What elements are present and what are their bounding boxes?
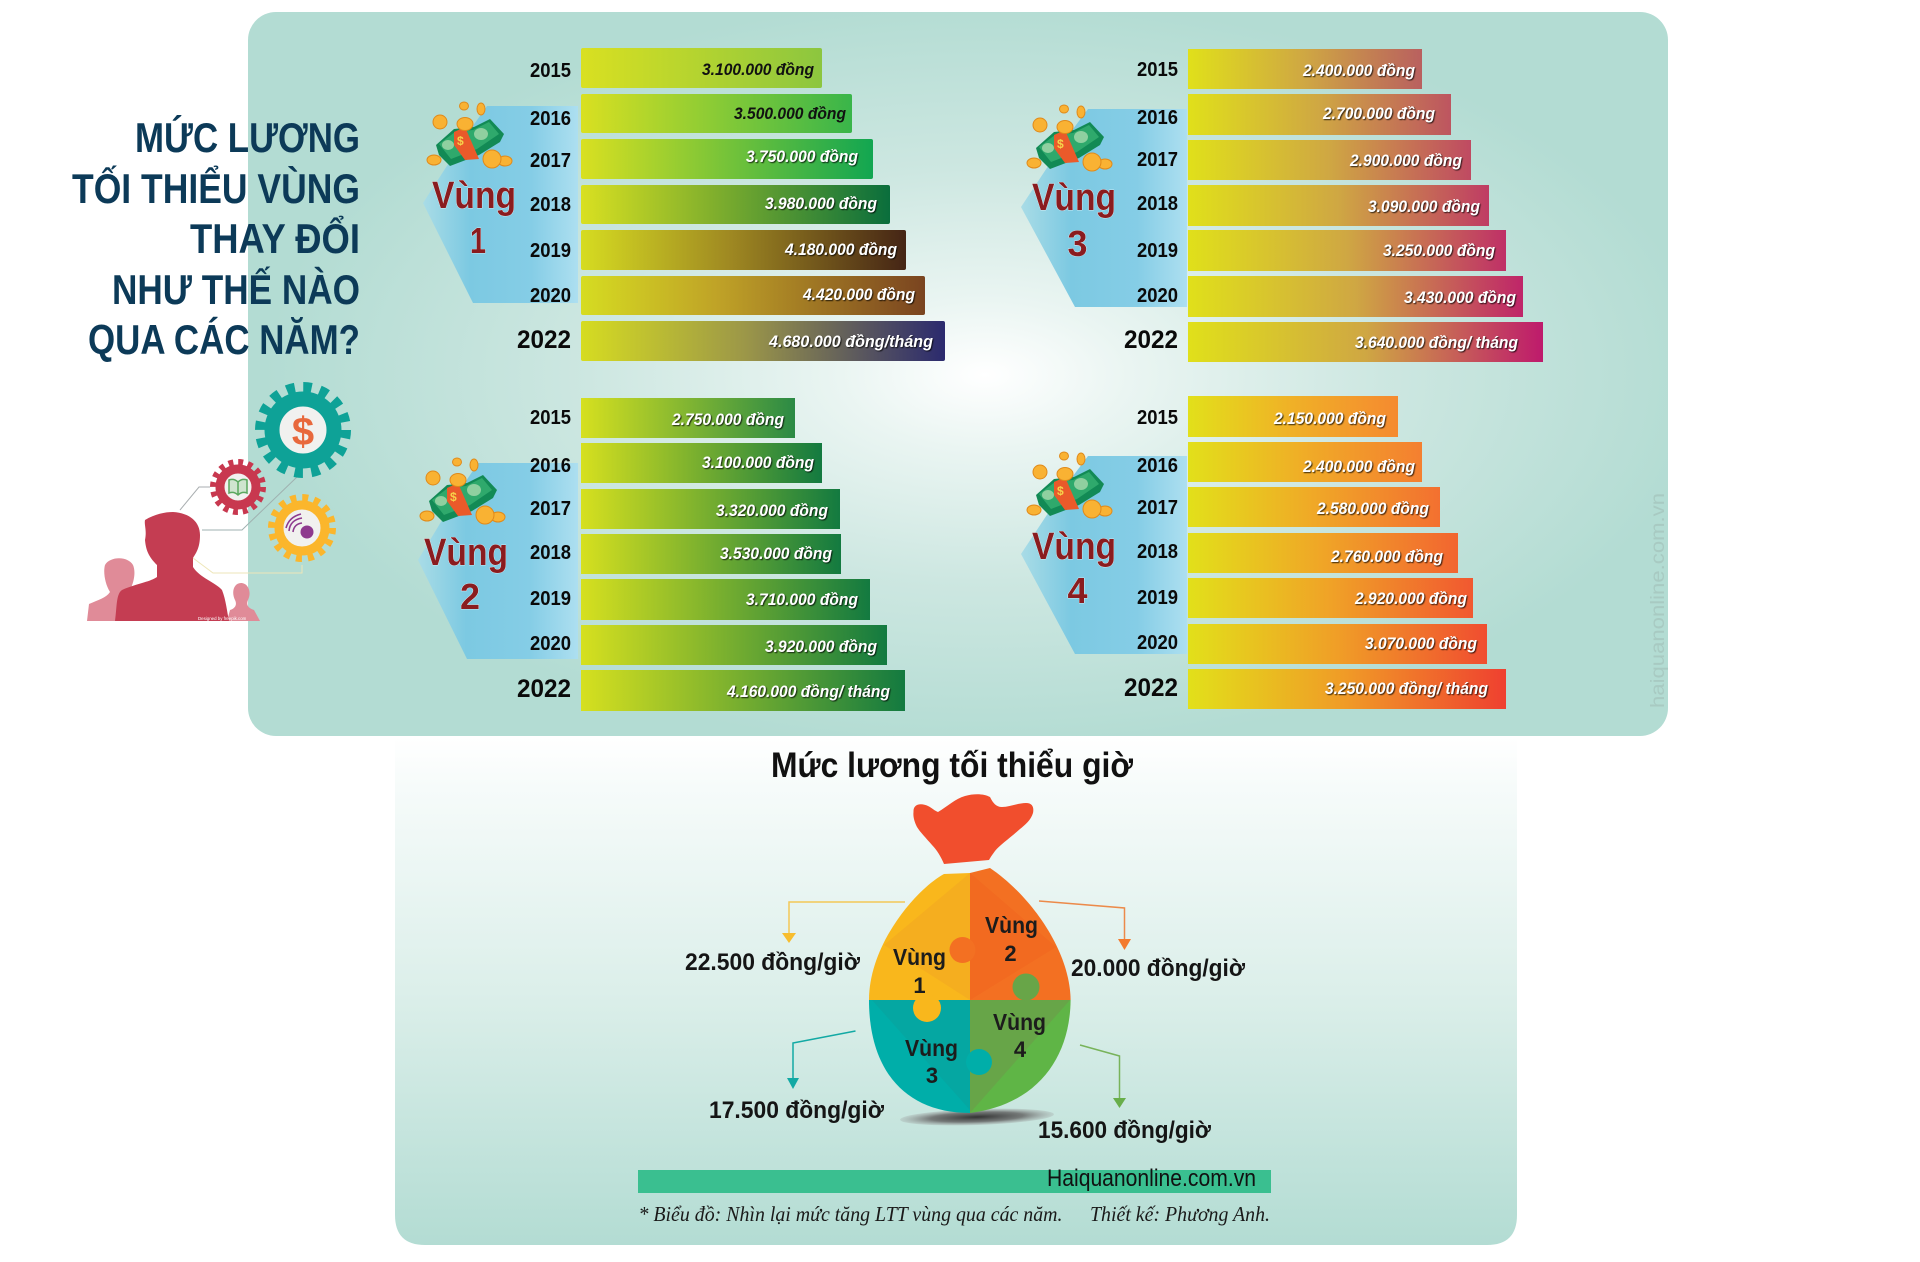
- bar: 2015: 2015: [530, 60, 571, 82]
- bar: 2019: 2019: [530, 588, 571, 610]
- icon: money and coins: [1027, 105, 1112, 171]
- bar: 2016: [530, 94, 852, 133]
- bar: 2017: 2.580.000 đồng: [1316, 499, 1430, 518]
- bar: 2015: 2015: [1137, 59, 1178, 81]
- bar: 2019: 4.180.000 đồng: [784, 240, 898, 259]
- bar: 2017: 3.320.000 đồng: [716, 501, 829, 520]
- title: [72, 113, 360, 363]
- bar: 2020: 4.420.000 đồng: [802, 285, 916, 304]
- label: Vùng 2: 2: [460, 576, 480, 617]
- bar: 2018: 2018: [530, 194, 571, 216]
- icon: teal gear with dollar: $: [292, 410, 314, 454]
- label: Vùng 1: Vùng: [432, 175, 516, 217]
- label: Vùng 4: 4: [1068, 570, 1088, 611]
- heading: hourly minimum wage: Mức lương tối thiểu giờ: [771, 746, 1133, 785]
- bar: 2020: [530, 276, 925, 315]
- label: Vùng 3: 3: [926, 1063, 938, 1088]
- value: Vùng 1 hourly: 22.500 đồng/giờ: [685, 949, 861, 976]
- bar: 2022: [1124, 322, 1543, 362]
- arrow: Vùng 2: [1039, 901, 1131, 950]
- bar: 2019: 2.920.000 đồng: [1354, 589, 1468, 608]
- bar: 2020: 2020: [1137, 285, 1178, 307]
- puzzle piece: Vùng 2: [970, 868, 1071, 1000]
- bar: 2019: 2019: [1137, 240, 1178, 262]
- label: Vùng 3: [1032, 177, 1116, 264]
- bar: 2019: [530, 579, 870, 620]
- label: Vùng 3: Vùng: [905, 1035, 958, 1061]
- title: QUA CÁC NĂM?: [88, 316, 360, 363]
- label: Vùng 2: Vùng: [424, 532, 508, 574]
- bar: 2016: [1137, 94, 1451, 135]
- bar: 2015: 2015: [1137, 407, 1178, 429]
- bar: 2018: 3.530.000 đồng: [720, 544, 833, 563]
- icon: teal gear with dollar: [260, 387, 346, 473]
- puzzle piece: Vùng 4: [970, 1000, 1071, 1113]
- label: Vùng 1: [432, 175, 516, 261]
- bar: 2020: 3.430.000 đồng: [1404, 288, 1517, 307]
- bar: 2017: 2017: [530, 150, 571, 172]
- label: Vùng 1: Vùng: [893, 944, 946, 970]
- value: Vùng 2 hourly: 20.000 đồng/giờ: [1071, 955, 1246, 982]
- bar: 2019: 3.710.000 đồng: [746, 590, 859, 609]
- label: Vùng 3: [905, 1035, 958, 1088]
- title: MỨC LƯƠNG: [135, 113, 360, 161]
- bar: 2017: 2017: [1137, 149, 1178, 171]
- bar: 2015: [1137, 49, 1422, 89]
- icon: money and coins: [420, 458, 505, 524]
- bar: 2017: [530, 139, 873, 179]
- icon: yellow gear with signal: [272, 498, 332, 558]
- bar: 2016: 2.400.000 đồng: [1302, 457, 1416, 476]
- bar: 2016: [1137, 442, 1422, 482]
- label: Vùng 3: 3: [1068, 223, 1088, 264]
- panel: top regional wage background: [248, 12, 1668, 736]
- source bar: Haiquanonline.com.vn: [1047, 1165, 1256, 1192]
- bar: 2018: 3.090.000 đồng: [1368, 197, 1481, 216]
- bar: 2018: [530, 185, 890, 224]
- label: Vùng 2: [424, 532, 508, 617]
- footnote: * Biểu đồ: Nhìn lại mức tăng LTT vùng qua các năm.: [638, 1202, 1062, 1226]
- icon: money and coins: $: [1057, 484, 1064, 498]
- bar: 2022: 2022: [1124, 326, 1178, 354]
- bar: 2020: 3.070.000 đồng: [1365, 634, 1478, 653]
- bag tie: [913, 794, 1033, 864]
- bar: 2020: 2020: [1137, 632, 1178, 654]
- bar: 2016: 2.700.000 đồng: [1322, 104, 1436, 123]
- icon: money and coins: $: [450, 490, 457, 504]
- panel: Vùng 4 chart: [1021, 396, 1506, 709]
- value: Vùng 3 hourly: 17.500 đồng/giờ: [709, 1097, 885, 1124]
- title: THAY ĐỔI: [190, 213, 360, 262]
- label: Vùng 1: 1: [913, 973, 926, 998]
- bar: 2022: 2022: [517, 675, 571, 703]
- label: Vùng 1: [893, 944, 946, 998]
- bar: 2015: [1137, 396, 1398, 437]
- title: NHƯ THẾ NÀO: [112, 266, 360, 313]
- label: Vùng 4: Vùng: [1032, 526, 1116, 568]
- title: TỐI THIỂU VÙNG: [72, 164, 360, 212]
- illustration: people and gears: [87, 387, 346, 621]
- bar: 2019: [530, 230, 906, 270]
- bar: 2019: 2019: [1137, 587, 1178, 609]
- label: Vùng 2: Vùng: [985, 912, 1038, 938]
- bar: 2018: 2.760.000 đồng: [1330, 547, 1444, 566]
- bar: 2019: [1137, 578, 1473, 618]
- bar: 2018: [530, 534, 841, 574]
- bar: 2015: 2.750.000 đồng: [671, 410, 785, 429]
- panel: Vùng 3 chart: [1021, 49, 1543, 362]
- label: Vùng 4: [993, 1009, 1046, 1062]
- bar: 2020: 2020: [530, 633, 571, 655]
- bar: 2018: [1137, 185, 1489, 226]
- bar: 2022: 3.640.000 đồng/ tháng: [1355, 333, 1519, 352]
- puzzle piece: Vùng 1: [869, 873, 970, 1000]
- bar: 2022: 2022: [517, 326, 571, 354]
- bar: 2020: 3.920.000 đồng: [765, 637, 878, 656]
- icon: money and coins: [1027, 452, 1112, 518]
- bar: 2017: [1137, 140, 1471, 180]
- value: Vùng 4 hourly: 15.600 đồng/giờ: [1038, 1117, 1212, 1144]
- bar: 2015: 2015: [530, 407, 571, 429]
- arrow: Vùng 3: [787, 1031, 856, 1089]
- people silhouettes: [87, 512, 260, 621]
- shape: Vùng 4 hexagon: [1021, 456, 1187, 654]
- bar: 2020: [1137, 624, 1487, 664]
- bar: 2016: 3.500.000 đồng: [734, 104, 847, 123]
- watermark: haiquanonline.com.vn: [1648, 493, 1669, 708]
- bar: 2016: 2016: [530, 455, 571, 477]
- bar: 2017: 2017: [1137, 497, 1178, 519]
- bar: 2022: 4.160.000 đồng/ tháng: [726, 682, 891, 701]
- bar: 2015: [530, 398, 795, 438]
- source bar: [638, 1165, 1271, 1193]
- footnote: Thiết kế: Phương Anh.: [1090, 1202, 1270, 1226]
- bar: 2022: 4.680.000 đồng/tháng: [768, 332, 934, 351]
- bar: 2018: 3.980.000 đồng: [765, 194, 878, 213]
- bar: 2020: 2020: [530, 285, 571, 307]
- bar: 2022: [517, 321, 945, 361]
- bar: 2019: 3.250.000 đồng: [1383, 241, 1496, 260]
- bar: 2015: [530, 48, 822, 88]
- label: Vùng 1: 1: [470, 220, 486, 261]
- shape: Vùng 2 hexagon: [418, 463, 578, 659]
- panel: Vùng 1 chart: [423, 48, 945, 361]
- bar: 2019: [1137, 230, 1506, 271]
- label: Vùng 3: Vùng: [1032, 177, 1116, 219]
- bar: 2018: 2018: [530, 542, 571, 564]
- bar: 2018: 2018: [1137, 193, 1178, 215]
- puzzle piece: Vùng 3: [869, 1000, 970, 1113]
- label: Vùng 2: [985, 912, 1038, 966]
- bag shadow: [900, 1106, 1054, 1128]
- arrow: Vùng 4: [1080, 1045, 1126, 1108]
- bar: 2015: 3.100.000 đồng: [702, 60, 815, 79]
- bar: 2016: 2016: [1137, 107, 1178, 129]
- bar: 2015: 2.400.000 đồng: [1302, 61, 1416, 80]
- icon: money and coins: $: [457, 134, 464, 148]
- bar: 2016: 2016: [530, 108, 571, 130]
- bar: 2017: [1137, 487, 1440, 527]
- bar: 2017: 2.900.000 đồng: [1349, 151, 1463, 170]
- bar: 2020: [530, 625, 887, 665]
- label: Vùng 4: [1032, 526, 1116, 611]
- bar: 2022: [517, 670, 905, 711]
- panel: hourly wage background: [395, 737, 1517, 1245]
- shape: Vùng 3 hexagon: [1021, 109, 1187, 307]
- icon: red gear with book: [213, 462, 263, 512]
- icon: money and coins: $: [1057, 137, 1064, 151]
- icon: money and coins: [427, 102, 512, 168]
- bar: 2018: 2018: [1137, 541, 1178, 563]
- bar: 2022: [1124, 669, 1506, 709]
- bar: 2016: 3.100.000 đồng: [702, 453, 815, 472]
- label: Vùng 4: 4: [1014, 1037, 1027, 1062]
- bar: 2016: [530, 443, 822, 483]
- people silhouettes: Designed by freepik.com: [198, 616, 247, 621]
- bar: 2022: 3.250.000 đồng/ tháng: [1325, 679, 1489, 698]
- bar: 2019: 2019: [530, 240, 571, 262]
- arrow: Vùng 1: [782, 902, 905, 943]
- panel: Vùng 2 chart: [418, 398, 905, 711]
- shape: Vùng 1 hexagon: [423, 106, 578, 303]
- chart: money bag puzzle: [869, 794, 1071, 1128]
- bar: 2020: [1137, 276, 1523, 317]
- bar: 2017: 2017: [530, 498, 571, 520]
- bar: 2022: 2022: [1124, 674, 1178, 702]
- bar: 2015: 2.150.000 đồng: [1273, 409, 1387, 428]
- label: Vùng 2: 2: [1004, 941, 1017, 966]
- bar: 2016: 2016: [1137, 455, 1178, 477]
- bar: 2017: [530, 489, 840, 529]
- label: Vùng 4: Vùng: [993, 1009, 1046, 1035]
- bar: 2017: 3.750.000 đồng: [746, 147, 859, 166]
- bar: 2018: [1137, 533, 1458, 573]
